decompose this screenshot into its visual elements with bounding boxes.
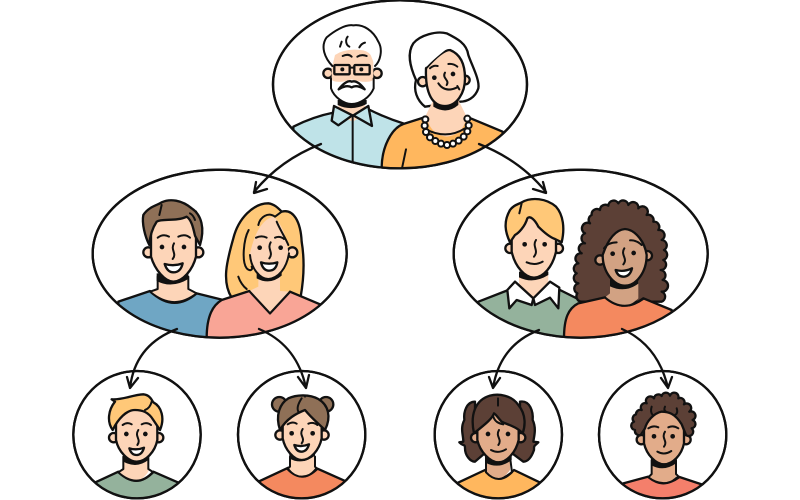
necklace (422, 116, 472, 148)
arrow: left parents to blonde boy (127, 329, 177, 388)
grandfather (293, 25, 405, 173)
father (118, 200, 223, 342)
mother (207, 203, 320, 342)
mother with curly hair (564, 200, 672, 342)
panel: left parents (93, 170, 347, 342)
arrow: right parents to curly boy (622, 329, 672, 388)
panel: right parents (454, 170, 708, 342)
father with sweater (478, 199, 587, 342)
panel: grandparents (273, 0, 527, 173)
arrow: grandparents to right parents (479, 144, 546, 193)
child boy curly hair (599, 371, 726, 500)
child girl with buns (238, 371, 365, 500)
panel: child boy blonde (73, 371, 365, 500)
arrow: grandparents to left parents (254, 144, 321, 193)
arrow: right parents to girl with pigtails (489, 330, 539, 388)
grandmother (382, 33, 503, 173)
panel: children right (435, 371, 726, 500)
arrow: left parents to girl with buns (259, 329, 309, 388)
